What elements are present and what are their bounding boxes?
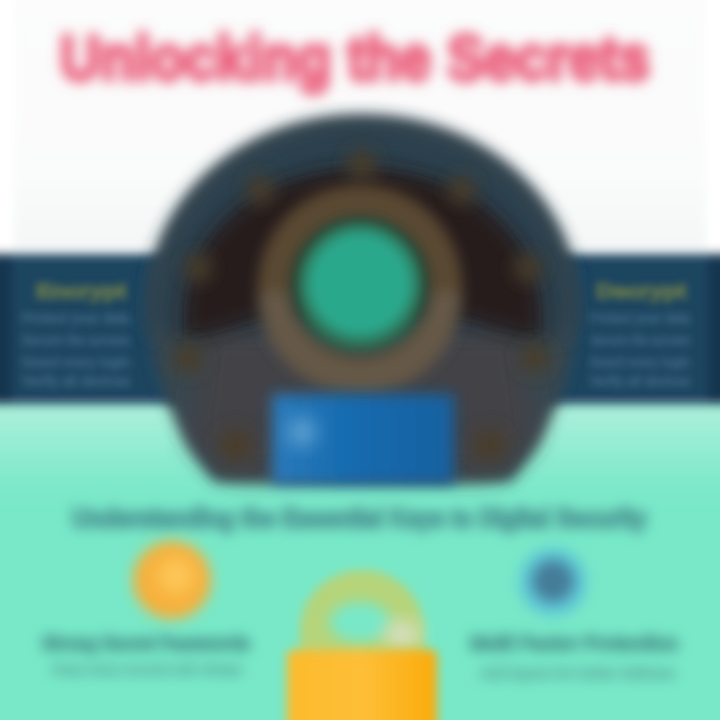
shackle highlight [384,621,420,647]
icon: padlock [287,570,437,720]
dial upper dark tone [150,125,575,345]
padlock shackle [300,570,424,670]
panel: dark band [0,254,720,404]
padlock body [287,650,437,720]
text block: right caption: Add layers for better defense [480,665,675,682]
text block: left caption [42,633,250,677]
right band list: Guard every login [590,354,690,371]
shackle opening [329,602,391,642]
dial dark track [184,168,541,340]
right band list: Secure the access [590,332,690,349]
left band list [22,310,131,390]
text block: left caption: Strong Secret Passwords [42,633,250,655]
text block: right caption [470,633,678,682]
left band heading: Encrypt [36,281,126,303]
dial lower grey [190,330,535,475]
dial green core [306,230,414,338]
coin highlight [158,558,194,594]
icon: blue token [519,548,587,616]
dial body [148,115,577,482]
text block: left caption: Keep every account safe always [52,661,242,677]
token core [532,560,574,602]
left band list: Verify all devices [22,373,130,390]
panel: left band text [22,281,131,390]
panel: blue keypad [272,394,454,484]
left band list: Protect your data [22,310,131,327]
left band list: Guard every login [22,354,130,371]
text block: right caption: Multi Factor Protection [470,633,678,655]
panel: right band text [590,281,691,390]
left band list: Secure the access [22,332,130,349]
right band list [590,310,691,390]
icon: vault dial [148,115,577,482]
keypad highlight [287,417,317,447]
right band list: Verify all devices [590,373,690,390]
right band list: Protect your data [590,310,691,327]
icon: orange coin [133,541,211,619]
right band heading: Decrypt [596,281,686,303]
dial studs [173,150,550,462]
title: Unlocking the Secrets [60,22,650,94]
dial bronze ring [275,202,445,377]
dial core halo [294,219,426,351]
